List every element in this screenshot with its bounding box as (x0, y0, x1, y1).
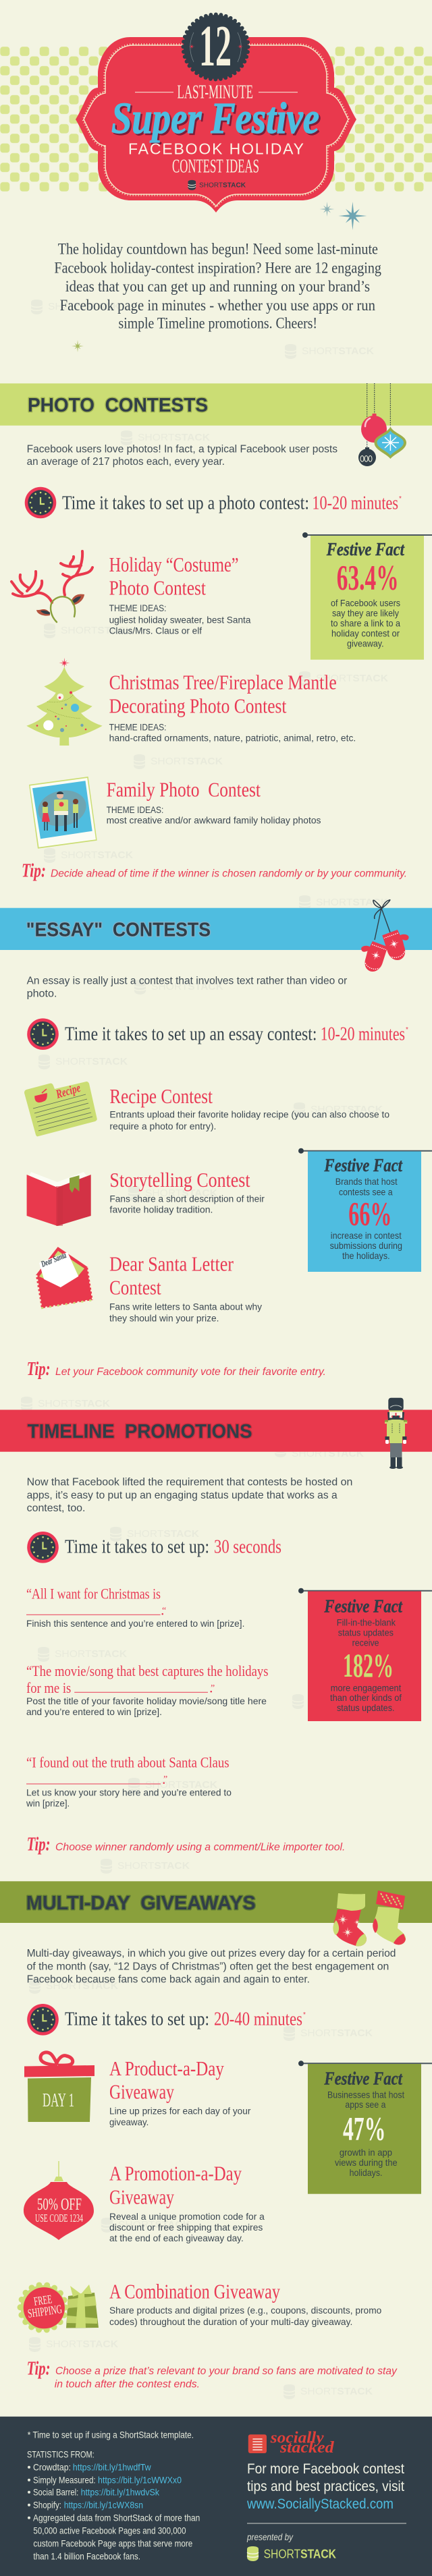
watermarks: ShortStack: SHORTSTACK (300, 2027, 373, 2039)
item: holiday costume photo contest: THEME IDEAS: (109, 603, 166, 613)
logo: socially stacked: stacked (279, 2439, 335, 2457)
footer panel (0, 2417, 432, 2576)
panel: festive fact 66%: increase in contest (331, 1230, 402, 1241)
item: santa claus quote: . (162, 1770, 166, 1787)
item: movie/song quote: “The movie/song that best captures the holidays (26, 1662, 269, 1679)
panel: festive fact 63.4%: of Facebook users (331, 597, 400, 608)
panel: festive fact 63.4% (302, 532, 432, 660)
watermarks: ShortStack (21, 300, 388, 2399)
icon: free shipping seal and gift: FREE (33, 2292, 53, 2308)
intro: multi-day giveaways (27, 1948, 396, 1985)
panel: festive fact 182%: status updates (338, 1627, 394, 1637)
panel: festive fact 47%: growth in app (340, 2147, 392, 2158)
watermarks: ShortStack: SHORTSTACK (117, 1860, 190, 1872)
item: movie/song quote: Post the title of your favorite holiday movie/song title here (26, 1696, 267, 1706)
panel: festive fact 66% (298, 1148, 432, 1272)
watermarks: ShortStack: SHORTSTACK (46, 1980, 118, 1992)
time to set up: timeline: Time it takes to set up: (65, 1536, 209, 1558)
item: all I want for christmas (26, 1585, 244, 1629)
footnote and statistics sources: https://bit.ly/1hwdfTw (73, 2461, 151, 2472)
presented by: presented by (246, 2531, 294, 2542)
item: recipe contest: require a photo for entry). (109, 1121, 216, 1131)
icon: clock (25, 487, 56, 518)
item: a product-a-day giveaway: Giveaway (109, 2080, 174, 2104)
tip: multi-day giveaways: Tip: (27, 2358, 51, 2379)
footnote and statistics sources: 50,000 active Facebook Pages and 300,000 (33, 2525, 186, 2536)
call to action: tips and best practices, visit (247, 2479, 404, 2494)
tip: timeline promotions (27, 1834, 345, 1855)
item: recipe contest: Entrants upload their favorite holiday recipe (you can also choose to (109, 1109, 389, 1120)
seal with number 12 (184, 13, 248, 80)
intro: essay contests (27, 975, 348, 999)
item: santa claus quote: win [prize]. (26, 1797, 70, 1808)
footnote and statistics sources: Social Barrel: (33, 2486, 78, 2497)
watermarks: ShortStack: SHORTSTACK (55, 1648, 127, 1660)
icon: santa letter envelope (36, 1247, 93, 1308)
watermarks: ShortStack: SHORTSTACK (55, 1056, 128, 1067)
panel: festive fact 182% (298, 1588, 432, 1721)
intro: essay contests: photo. (27, 988, 57, 999)
item: family photo contest (107, 778, 321, 826)
item: dear santa letter contest: Fans write letters to Santa about why (109, 1301, 262, 1312)
intro: multi-day giveaways: Facebook because fans come back again and again to enter. (27, 1973, 310, 1985)
item: all I want for christmas: . (161, 1601, 165, 1618)
section banner: photo contests (0, 383, 432, 426)
intro: timeline promotions (27, 1477, 352, 1514)
item: family photo contest: Family Photo Contest (107, 778, 261, 802)
item: santa claus quote (26, 1754, 232, 1808)
panel: festive fact 66%: submissions during (330, 1240, 402, 1251)
panel: festive fact 66%: Brands that host (335, 1176, 398, 1187)
item: a promotion-a-day giveaway: Reveal a unique promotion code for a (109, 2211, 265, 2222)
footnote and statistics sources (27, 2429, 200, 2561)
call to action: For more Facebook contest (247, 2461, 404, 2477)
intro text: ideas that you can get up and running on your brand’s (65, 278, 370, 295)
item: family photo contest: THEME IDEAS: (107, 804, 163, 815)
subtitle: Contest Ideas: CONTEST IDEAS (172, 157, 259, 177)
watermarks: ShortStack: SHORTSTACK (300, 2386, 373, 2397)
panel: festive fact 47% (298, 2061, 432, 2194)
item: christmas tree photo contest (109, 671, 356, 743)
panel: festive fact 182%: status updates. (337, 1702, 394, 1713)
panel: festive fact 182%: Fill-in-the-blank (337, 1617, 396, 1627)
item: a product-a-day giveaway: A Product-a-Day (109, 2056, 224, 2080)
subtitle: last-minute: LAST-MINUTE (177, 82, 253, 103)
heading: multi-day giveaways: MULTI-DAY GIVEAWAYS (26, 1893, 256, 1914)
icon: family polaroid (29, 777, 97, 849)
panel: festive fact 47%: apps see a (345, 2099, 386, 2110)
item: movie/song quote: . (209, 1679, 213, 1696)
item: all I want for christmas: “ (162, 1606, 166, 1616)
icon: hanging ornaments (358, 383, 406, 466)
watermarks: ShortStack: SHORTSTACK (138, 432, 210, 443)
item: family photo contest: most creative and/or awkward family holiday photos (107, 815, 321, 826)
icon: nutcracker (385, 1398, 407, 1469)
item: all I want for christmas: “All I want for Christmas is (26, 1585, 161, 1602)
footnote and statistics sources: https://bit.ly/1cWX8sn (64, 2499, 143, 2510)
item: christmas tree photo contest: THEME IDEAS: (109, 721, 166, 732)
tip: timeline promotions: Tip: (27, 1834, 51, 1855)
item: recipe contest: Recipe Contest (109, 1084, 213, 1108)
watermarks: ShortStack: SHORTSTACK (310, 1104, 383, 1115)
heading: timeline promotions: TIMELINE PROMOTIONS (28, 1421, 252, 1443)
title: Super Festive: Super Festive (111, 94, 319, 143)
footnote and statistics sources: https://bit.ly/1cWWXx0 (98, 2474, 182, 2485)
panel: festive fact 47%: Festive Fact (324, 2068, 403, 2088)
item: a promotion-a-day giveaway: at the end of each giveaway day. (109, 2233, 244, 2243)
panel: festive fact 63.4%: to share a link to a (331, 617, 400, 628)
footnote and statistics sources: * Time to set up if using a ShortStack template. (28, 2429, 194, 2440)
watermarks: ShortStack: SHORTSTACK (151, 756, 223, 767)
watermarks: ShortStack: SHORTSTACK (145, 1779, 217, 1791)
footnote and statistics sources: Aggregated data from ShortStack of more than (33, 2512, 200, 2523)
item: movie/song quote: ” (211, 1683, 215, 1693)
tip: multi-day giveaways: Choose a prize that’s relevant to your brand so fans are motivated to stay (55, 2365, 398, 2377)
time to set up: essay contest: * (406, 1026, 408, 1034)
time to set up: giveaways: * (303, 2011, 306, 2019)
item: storytelling contest: Storytelling Contest (109, 1168, 250, 1192)
intro: multi-day giveaways: Multi-day giveaways, in which you give out prizes every day for a certain period (27, 1948, 396, 1959)
panel: festive fact 182%: Festive Fact (324, 1596, 403, 1616)
badge logo: ShortStack: SHORTSTACK (199, 182, 246, 190)
item: a combination giveaway: Share products and digital prizes (e.g., coupons, discounts, promo (109, 2305, 381, 2316)
intro text: Facebook holiday-contest inspiration? Here are 12 engaging (54, 259, 381, 276)
section banner: timeline promotions (0, 1410, 432, 1452)
icon: santa letter envelope: Dear Santa (39, 1250, 68, 1269)
watermarks: ShortStack: SHORTSTACK (118, 2219, 190, 2231)
call to action: www.SociallyStacked.com (246, 2496, 394, 2512)
icon: christmas stockings (333, 1885, 406, 1947)
tip: multi-day giveaways (27, 2358, 398, 2390)
item: a product-a-day giveaway: giveaway. (109, 2117, 148, 2127)
item: a combination giveaway: codes) throughout the duration of your multi-day giveaway. (109, 2316, 352, 2327)
item: a promotion-a-day giveaway (109, 2162, 265, 2243)
watermarks: ShortStack: SHORTSTACK (48, 301, 120, 312)
icon: reindeer antlers headband (11, 551, 92, 622)
watermarks: ShortStack: SHORTSTACK (302, 345, 374, 357)
panel: festive fact 63.4%: say they are likely (332, 607, 399, 618)
item: a promotion-a-day giveaway: discount or free shipping that expires (109, 2222, 263, 2233)
icon: promo ornament (24, 2161, 94, 2240)
item: santa claus quote: Let us know your story here and you’re entered to (26, 1787, 232, 1798)
call to action (246, 2461, 404, 2512)
panel: festive fact 47%: holidays. (350, 2167, 382, 2178)
panel: festive fact 66%: 66% (348, 1195, 392, 1233)
item: christmas tree photo contest: Decorating Photo Contest (109, 694, 287, 718)
tip: photo contests (22, 860, 407, 881)
item: a combination giveaway (109, 2280, 381, 2327)
tip: essay contests: Tip: (27, 1359, 51, 1380)
tip: essay contests (27, 1359, 326, 1380)
time to set up: photo contest: Time it takes to set up a photo contest: (62, 492, 309, 513)
panel: festive fact 66%: Festive Fact (324, 1155, 403, 1175)
footnote and statistics sources: Crowdtap: (33, 2461, 71, 2472)
item: recipe contest (109, 1084, 389, 1131)
panel: festive fact 47%: Businesses that host (327, 2089, 404, 2100)
item: dear santa letter contest: they should win your prize. (109, 1312, 219, 1323)
item: a combination giveaway: A Combination Giveaway (109, 2280, 280, 2303)
tip: photo contests: Tip: (22, 860, 46, 881)
item: movie/song quote: for me is (26, 1679, 71, 1696)
logo: socially stacked: socially (270, 2430, 324, 2447)
icon: day 1 gift box: DAY 1 (43, 2090, 74, 2111)
panel: festive fact 63.4%: holiday contest or (331, 627, 400, 638)
item: a promotion-a-day giveaway: A Promotion-a-Day (109, 2162, 242, 2185)
watermarks: ShortStack: SHORTSTACK (151, 981, 223, 992)
intro: timeline promotions: apps, it’s easy to put up an engaging status update that works as a (27, 1490, 338, 1501)
seal with number 12: 12 (199, 13, 232, 78)
footnote and statistics sources: Shopify: (33, 2499, 61, 2510)
item: christmas tree photo contest: Christmas Tree/Fireplace Mantle (109, 671, 337, 694)
footnote and statistics sources: https://bit.ly/1hwdvSk (81, 2486, 160, 2497)
item: holiday costume photo contest (109, 553, 251, 636)
footnote and statistics sources: custom Facebook Page apps that serve more (33, 2538, 192, 2548)
intro: photo contests: Facebook users love photos! In fact, a typical Facebook user posts (27, 444, 338, 455)
subtitle: Facebook Holiday: FACEBOOK HOLIDAY (128, 140, 304, 157)
icon: christmas tree (26, 658, 103, 746)
title: Super Festive: Super Festive (113, 96, 321, 144)
panel: festive fact 182%: than other kinds of (330, 1692, 402, 1703)
panel: festive fact 66%: contests see a (339, 1186, 393, 1197)
item: storytelling contest: Fans share a short description of their (109, 1194, 265, 1204)
intro: multi-day giveaways: of the month (say, “12 Days of Christmas”) often get the best engagement on (27, 1961, 389, 1972)
item: movie/song quote: and you’re entered to win [prize]. (26, 1706, 162, 1717)
item: christmas tree photo contest: hand-crafted ornaments, nature, patriotic, animal, retro, etc. (109, 732, 356, 743)
panel: festive fact 47%: 47% (343, 2110, 385, 2148)
item: a product-a-day giveaway: Line up prizes for each day of your (109, 2105, 251, 2116)
intro: photo contests (27, 444, 338, 468)
watermarks: ShortStack: SHORTSTACK (292, 1448, 364, 1459)
item: dear santa letter contest: Dear Santa Letter (109, 1252, 234, 1275)
panel: festive fact 182%: more engagement (331, 1682, 401, 1693)
time to set up: essay contest: 10-20 minutes (321, 1024, 405, 1045)
item: holiday costume photo contest: Photo Contest (109, 576, 206, 600)
icon: clock (27, 1532, 59, 1563)
icon: mittens (355, 900, 415, 974)
watermarks: ShortStack: SHORTSTACK (61, 849, 133, 861)
icon: free shipping seal and gift (20, 2285, 99, 2330)
footnote and statistics sources: than 1.4 billion Facebook fans. (33, 2550, 140, 2561)
watermarks: ShortStack: SHORTSTACK (316, 673, 388, 684)
watermarks: ShortStack: SHORTSTACK (127, 1528, 199, 1540)
badge logo: ShortStack (188, 180, 246, 190)
section banner: essay contests (0, 908, 432, 950)
icon: promo ornament: 50% OFF (37, 2195, 82, 2214)
icon: recipe card: Recipe (54, 1081, 82, 1101)
icon: free shipping seal and gift: SHIPPING (27, 2302, 63, 2320)
item: holiday costume photo contest: Claus/Mrs. Claus or elf (109, 625, 202, 636)
panel: festive fact 66%: the holidays. (342, 1250, 390, 1261)
time to set up: giveaways: Time it takes to set up: (65, 2009, 209, 2030)
decorative stars (72, 202, 367, 352)
intro: essay contests: An essay is really just a contest that involves text rather than video or (27, 975, 348, 986)
item: holiday costume photo contest: ugliest holiday sweater, best Santa (109, 614, 251, 625)
watermarks: ShortStack: SHORTSTACK (316, 897, 388, 908)
intro text: simple Timeline promotions. Cheers! (119, 315, 317, 332)
watermarks: ShortStack: SHORTSTACK (61, 625, 133, 636)
header dotted pattern band (0, 47, 432, 192)
panel: festive fact 182%: 182% (343, 1646, 394, 1684)
item: santa claus quote: ” (163, 1774, 167, 1785)
item: holiday costume photo contest: Holiday “Costume” (109, 553, 239, 576)
time to set up: giveaways: 20-40 minutes (214, 2009, 302, 2030)
tip: multi-day giveaways: in touch after the contest ends. (55, 2378, 200, 2390)
item: dear santa letter contest: Contest (109, 1275, 161, 1299)
heading: essay contests: "ESSAY" CONTESTS (26, 919, 211, 941)
watermarks: ShortStack: SHORTSTACK (38, 1398, 110, 1409)
time to set up: photo contest: * (399, 495, 402, 503)
tip: timeline promotions: Choose winner randomly using a comment/Like importer tool. (55, 1841, 345, 1853)
item: dear santa letter contest (109, 1252, 262, 1323)
item: storytelling contest: favorite holiday tradition. (109, 1204, 213, 1215)
item: all I want for christmas: Finish this sentence and you’re entered to win [prize]. (26, 1618, 244, 1629)
time to set up: timeline: 30 seconds (214, 1536, 281, 1558)
panel: festive fact 182%: receive (352, 1637, 379, 1648)
tip: photo contests: Decide ahead of time if the winner is chosen randomly or by your community. (51, 868, 407, 879)
tip: essay contests: Let your Facebook community vote for their favorite entry. (55, 1366, 326, 1378)
heading: photo contests: PHOTO CONTESTS (28, 395, 208, 416)
intro: photo contests: an average of 217 photos each, every year. (27, 456, 225, 468)
intro: timeline promotions: contest, too. (27, 1503, 85, 1514)
panel: festive fact 63.4%: Festive Fact (326, 539, 405, 559)
intro text: Facebook page in minutes - whether you use apps or run (60, 297, 375, 314)
watermarks: ShortStack: SHORTSTACK (145, 1187, 217, 1199)
time to set up: essay contest: Time it takes to set up an essay contest: (65, 1024, 317, 1045)
intro text (54, 241, 381, 332)
panel: festive fact 63.4%: giveaway. (347, 638, 384, 648)
item: santa claus quote: “I found out the truth about Santa Claus (26, 1754, 230, 1770)
icon: day 1 gift box (24, 2052, 94, 2122)
icon: recipe card (24, 1081, 97, 1136)
footnote and statistics sources: Simply Measured: (33, 2474, 96, 2485)
watermarks: ShortStack: SHORTSTACK (46, 2339, 118, 2350)
item: storytelling contest (109, 1168, 265, 1215)
section banner: multi-day giveaways (0, 1881, 432, 1923)
intro: timeline promotions: Now that Facebook lifted the requirement that contests be hosted on (27, 1477, 352, 1488)
item: movie/song quote (26, 1662, 269, 1717)
icon: clock (27, 2004, 59, 2036)
panel: festive fact 47%: views during the (335, 2157, 398, 2168)
item: a promotion-a-day giveaway: Giveaway (109, 2185, 174, 2209)
logo: shortstack: SHORTSTACK (264, 2548, 336, 2561)
logo: socially stacked (248, 2430, 335, 2457)
icon: clock (27, 1018, 59, 1050)
time to set up: photo contest: 10-20 minutes (312, 492, 398, 513)
title badge (76, 13, 356, 213)
intro text: The holiday countdown has begun! Need some last-minute (58, 241, 378, 258)
item: a product-a-day giveaway (109, 2056, 251, 2127)
icon: red book (27, 1172, 91, 1226)
icon: promo ornament: USE CODE 1234 (35, 2212, 83, 2224)
footnote and statistics sources: STATISTICS FROM: (27, 2448, 94, 2459)
